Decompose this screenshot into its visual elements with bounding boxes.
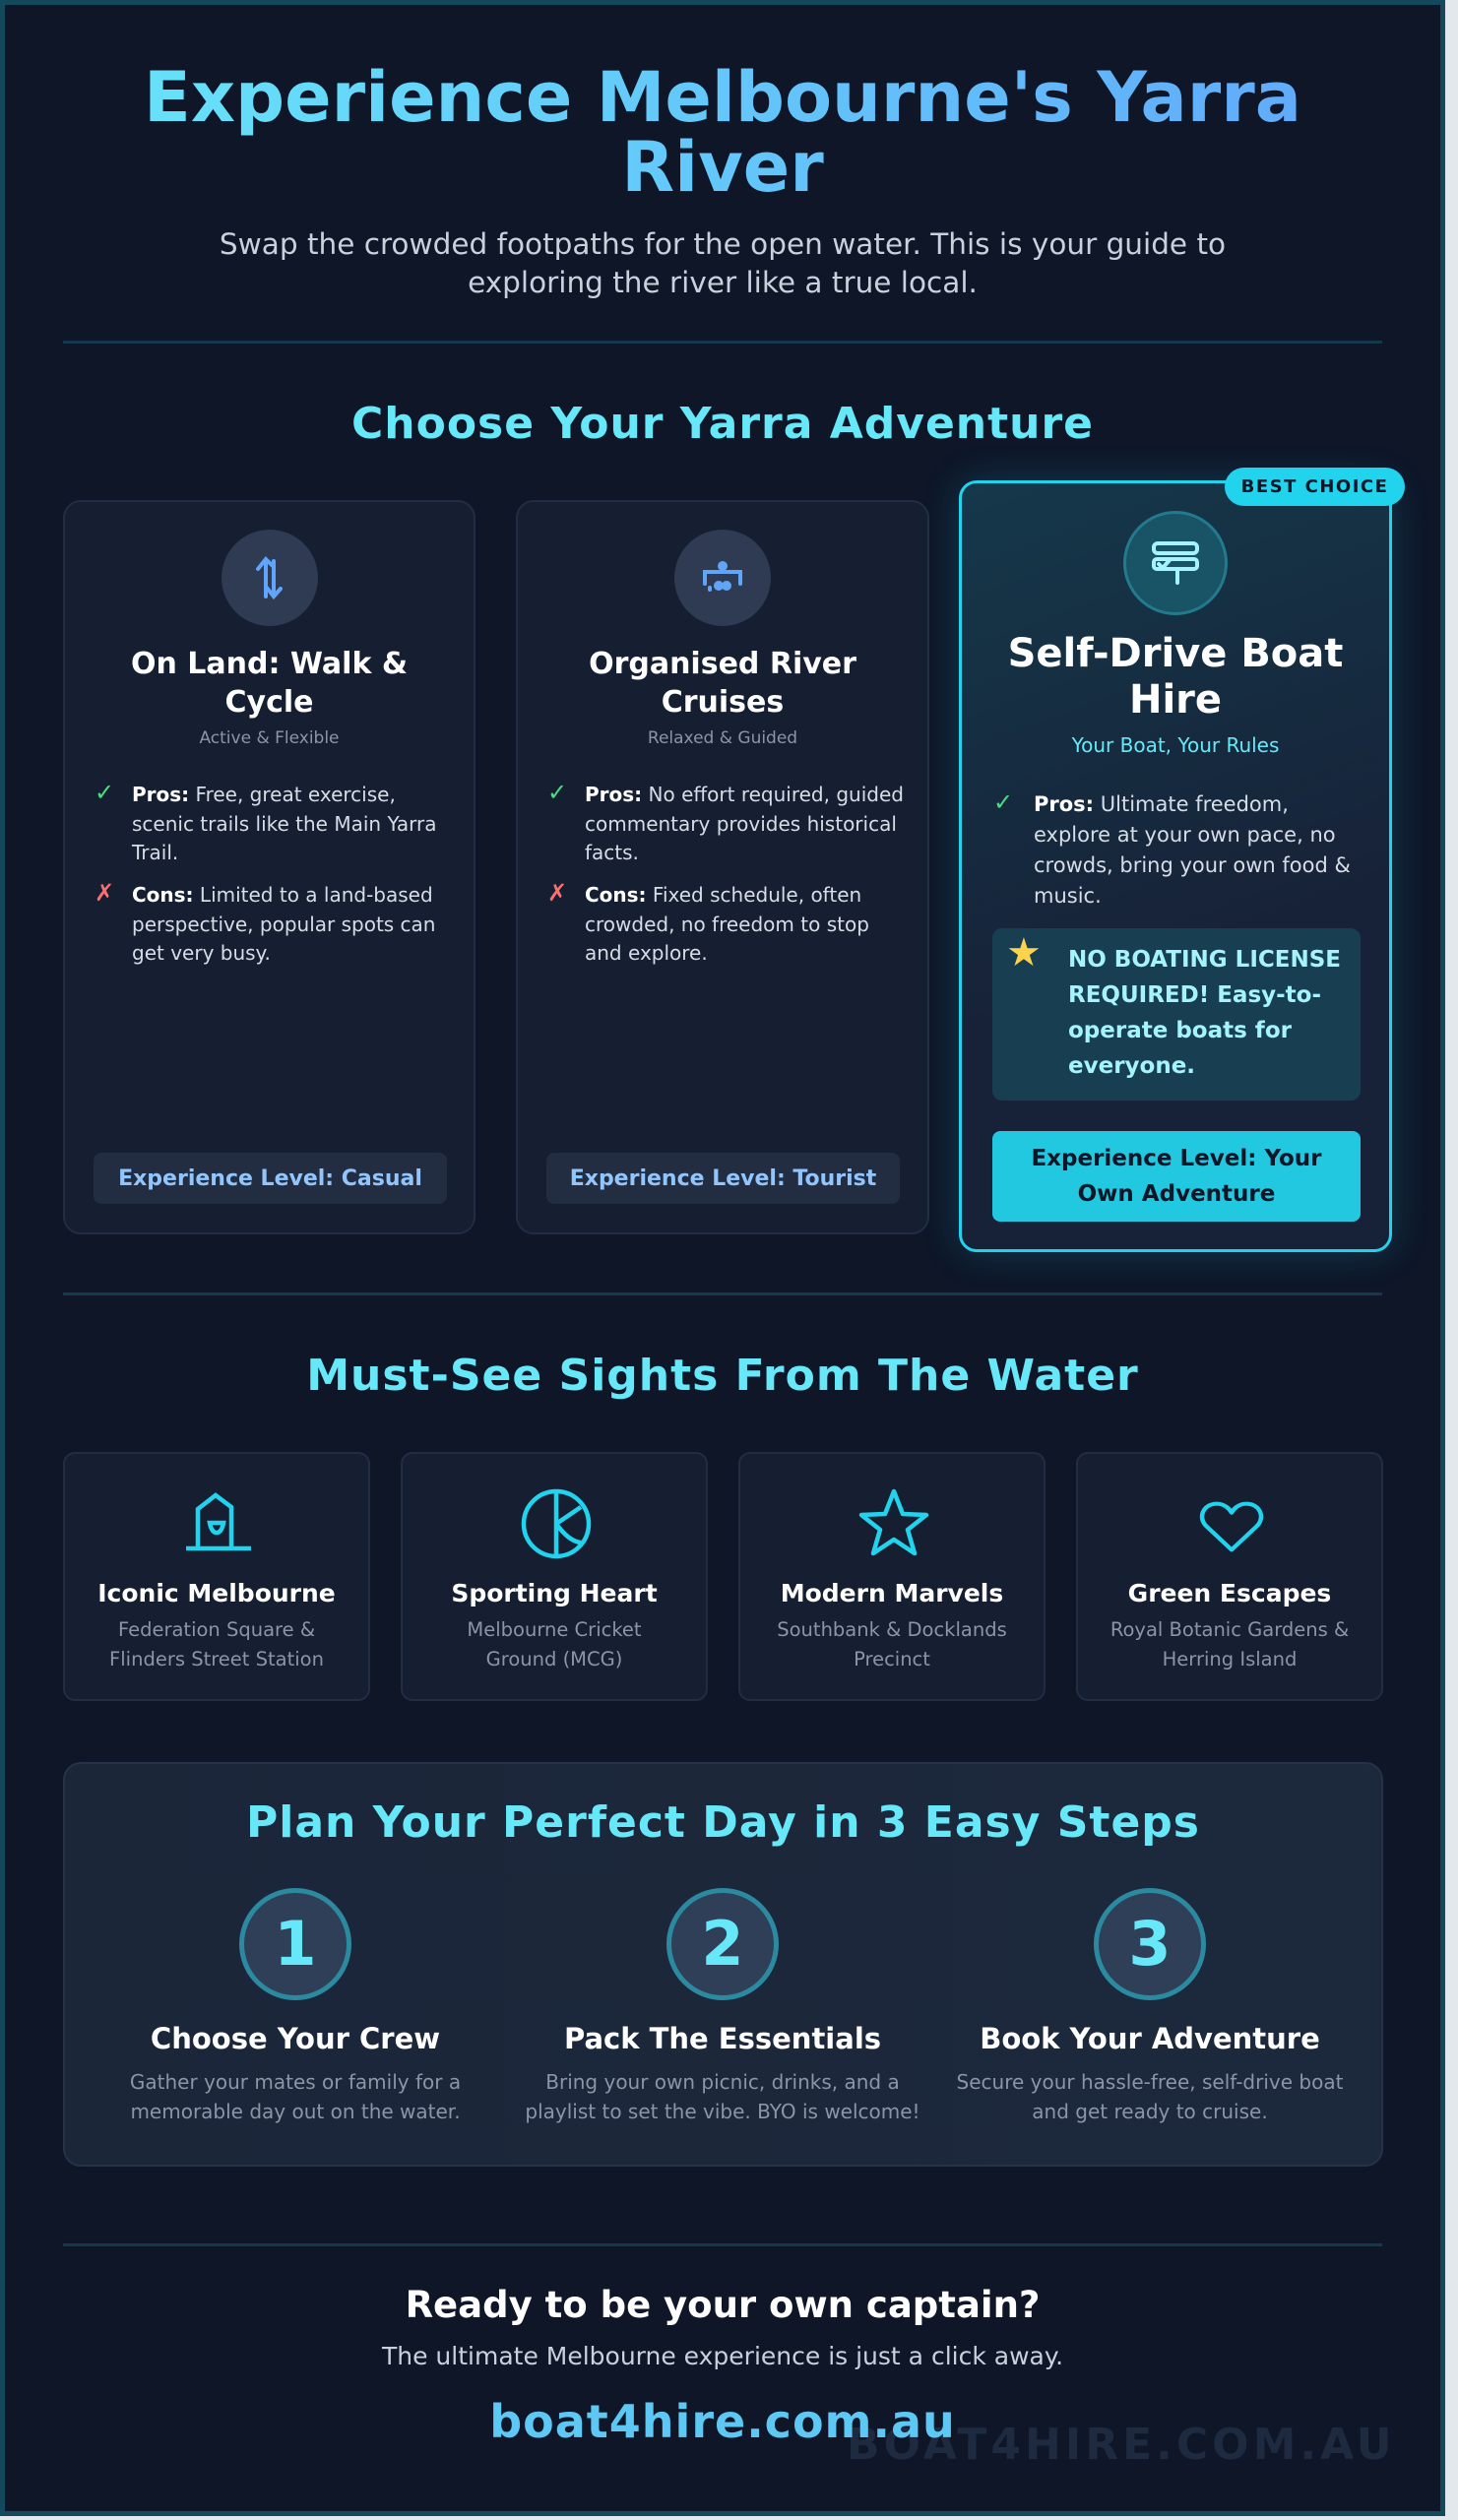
callout: no license: NO BOATING LICENSE REQUIRED! Easy-to-operate boats for everyone. [1068, 947, 1341, 1079]
card title: Cycle [224, 685, 313, 720]
card title: Hire [1129, 677, 1222, 723]
button: Own Adventure [1078, 1181, 1275, 1207]
step 1: memorable day out on the water. [130, 2100, 461, 2123]
title [0, 63, 1445, 203]
button: Experience Level: Casual [118, 1166, 422, 1191]
sight: modern marvels [738, 1452, 1046, 1701]
heading: choose adventure: Choose Your Yarra Adventure [351, 399, 1094, 449]
icon: building [186, 1492, 251, 1551]
heading: steps: Plan Your Perfect Day in 3 Easy Steps [246, 1797, 1200, 1848]
panel: cruises [516, 500, 929, 1234]
pros: Pros: Free, great exercise, scenic trails like the Main Yarra Trail. [132, 783, 437, 864]
callout: no license [992, 928, 1361, 1101]
sight: iconic melbourne: Flinders Street Station [109, 1648, 324, 1670]
icon: star: ★ [1006, 930, 1042, 976]
pros: Pros: No effort required, guided commentary provides historical facts. [585, 783, 904, 864]
card subtitle: Your Boat, Your Rules [1072, 733, 1279, 757]
panel: on land: ✓ [95, 779, 114, 806]
step 3: and get ready to cruise. [1032, 2100, 1268, 2123]
button: Experience Level: Your [1031, 1146, 1322, 1171]
panel: plan steps [63, 1762, 1383, 2167]
button [992, 1131, 1361, 1222]
badge: best choice [1225, 468, 1405, 506]
button [94, 1153, 447, 1204]
button [546, 1153, 900, 1204]
step 2 [525, 1888, 920, 2123]
button: Experience Level: Tourist [570, 1166, 876, 1191]
cta text: The ultimate Melbourne experience is just a click away. [382, 2342, 1063, 2370]
heading: sights: Must-See Sights From The Water [306, 1351, 1139, 1401]
icon: arrows [222, 530, 318, 626]
sight: iconic melbourne: Iconic Melbourne [97, 1579, 336, 1607]
sight: sporting heart [401, 1452, 708, 1701]
card subtitle: Relaxed & Guided [648, 728, 797, 748]
step 2: 2 [701, 1908, 744, 1980]
icon: boat [1123, 511, 1228, 615]
step 3 [957, 1888, 1343, 2123]
icon: stadium [522, 1488, 591, 1559]
step 1: 1 [274, 1908, 317, 1980]
cta url: boat4hire.com.au [489, 2395, 956, 2448]
panel: self-drive boat hire [959, 480, 1392, 1252]
sight: green escapes [1076, 1452, 1383, 1701]
card title: On Land: Walk & [131, 647, 408, 681]
card title [589, 647, 856, 720]
icon: people [674, 530, 771, 626]
sight: sporting heart: Melbourne Cricket [467, 1618, 642, 1641]
step 3: Book Your Adventure [980, 2022, 1320, 2055]
card title: Organised River [589, 647, 856, 681]
sight: green escapes: Herring Island [1163, 1648, 1297, 1670]
sight: green escapes: Royal Botanic Gardens & [1110, 1618, 1349, 1641]
panel: on land [63, 500, 475, 1234]
step 2: playlist to set the vibe. BYO is welcome! [525, 2100, 920, 2123]
icon: heart [1199, 1502, 1264, 1551]
step 1: Choose Your Crew [151, 2022, 440, 2055]
icon: star [858, 1488, 929, 1555]
step 1: Gather your mates or family for a [130, 2070, 461, 2094]
step 1 [130, 1888, 461, 2123]
pros: Pros: Ultimate freedom, explore at your own pace, no crowds, bring your own food & music. [1034, 792, 1351, 908]
sight: modern marvels: Precinct [854, 1648, 930, 1670]
panel: cruises: ✓ [547, 779, 567, 806]
sight: sporting heart: Ground (MCG) [486, 1648, 622, 1670]
panel: cruises: ✗ [547, 879, 567, 907]
title: Experience Melbourne's Yarra [144, 57, 1301, 138]
cons: Cons: Limited to a land-based perspective, popular spots can get very busy. [132, 883, 435, 965]
title: River [621, 127, 824, 208]
step 3: Secure your hassle-free, self-drive boat [957, 2070, 1343, 2094]
card title: Cruises [662, 685, 784, 720]
sight: sporting heart: Sporting Heart [451, 1579, 658, 1607]
subtitle: Swap the crowded footpaths for the open water. This is your guide to exploring the river like a true local. [220, 227, 1226, 299]
panel: self-drive boat hire: ✓ [993, 788, 1013, 816]
card title [131, 647, 408, 720]
step 2: Bring your own picnic, drinks, and a [545, 2070, 900, 2094]
cons: Cons: Fixed schedule, often crowded, no freedom to stop and explore. [585, 883, 869, 965]
sight: iconic melbourne [63, 1452, 370, 1701]
panel: on land: ✗ [95, 879, 114, 907]
watermark: BOAT4HIRE.COM.AU [847, 2420, 1396, 2470]
sight: green escapes: Green Escapes [1128, 1579, 1331, 1607]
sight: modern marvels: Southbank & Docklands [777, 1618, 1007, 1641]
card title [1008, 631, 1343, 723]
cta heading: Ready to be your own captain? [406, 2284, 1040, 2326]
sight: iconic melbourne: Federation Square & [118, 1618, 315, 1641]
card title: Self-Drive Boat [1008, 631, 1343, 676]
sight: modern marvels: Modern Marvels [781, 1579, 1003, 1607]
step 2: Pack The Essentials [564, 2022, 881, 2055]
step 3: 3 [1128, 1908, 1172, 1980]
badge: best choice: BEST CHOICE [1241, 476, 1388, 497]
card subtitle: Active & Flexible [199, 728, 340, 748]
